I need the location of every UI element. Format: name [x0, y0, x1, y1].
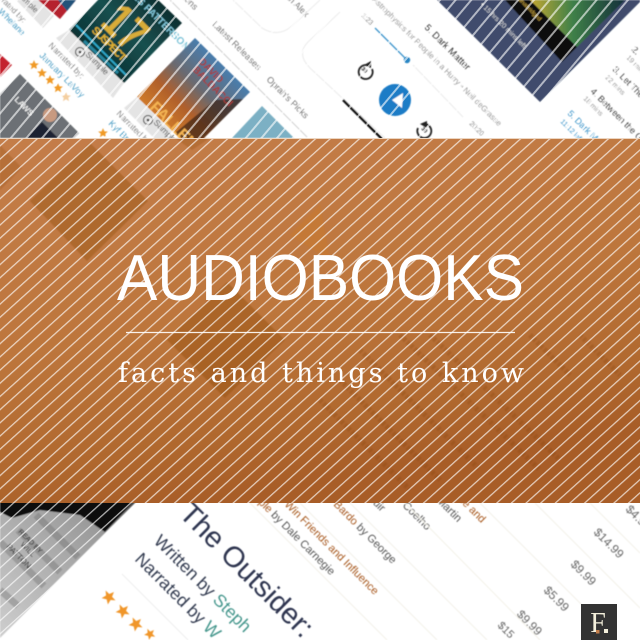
narrator text 1: [29, 40, 87, 101]
list: book titles: Coelho: [400, 500, 433, 533]
sample strip 2: [124, 97, 179, 145]
sample strip 1: [56, 30, 124, 98]
chapter list: 11:12 left: [559, 118, 584, 143]
rating divider: [122, 574, 188, 640]
track title: 5. Dark Matter: [422, 22, 472, 73]
narrator text 2: [98, 108, 155, 154]
logo badge: F: [590, 608, 606, 639]
book cover: grey politician: LAWS: [13, 95, 36, 118]
narrator text 2: Narrated by:: [115, 108, 155, 148]
red cover fragment: [0, 54, 12, 77]
narrator text 1: Narrated by:: [47, 40, 87, 80]
book cover: 17th Suspect: [69, 0, 192, 83]
scrubber bar: [343, 100, 382, 139]
rating stars: [100, 587, 158, 640]
sample strip 1: Sample: [84, 49, 111, 77]
list: prices: [495, 502, 640, 640]
list: book titles: Win Friends and Influence: [282, 499, 381, 597]
band top edge: [0, 138, 640, 140]
title: AUDIOBOOKS: [117, 241, 524, 314]
list: book titles: Bardo by George: [331, 499, 399, 566]
book cover: top-left red: [38, 0, 76, 19]
narrator line: Narrated by W: [131, 549, 225, 640]
book cover: Fallen: [137, 38, 250, 153]
bottom left book cover: Will Patton: WILL: [19, 540, 37, 559]
book title: The Outsider:: [173, 497, 320, 640]
chapter list: 5. Dark M: [566, 108, 600, 143]
list: prices: $9.99: [568, 557, 599, 589]
player panel: [343, 0, 504, 139]
time elapsed: 1:23: [360, 12, 374, 27]
list row dividers: [250, 503, 640, 640]
list: book titles: ple by Dale Carnegie: [256, 497, 337, 578]
cover credit: READ BY: [17, 528, 43, 555]
narrator text 1: January LaVoy: [38, 50, 87, 100]
sample strip top-left: [15, 0, 54, 28]
list: book titles: R. Martin: [424, 485, 464, 525]
book cover: grey politician: [0, 74, 79, 138]
book art gradient: [530, 0, 625, 47]
play button: [379, 84, 411, 116]
tab labels: Oprah's Picks: [265, 74, 311, 121]
tab divider: [170, 0, 307, 137]
list: prices: $5.99: [541, 583, 572, 615]
tab labels: [169, 0, 312, 121]
list: book titles: ce and: [456, 494, 488, 525]
cover author: DAVID: [196, 56, 225, 86]
narrator text 2: Kyf Brown: [107, 118, 143, 154]
stripes over bottom book: [0, 503, 136, 638]
icon: rewind 30: 30: [360, 66, 368, 75]
cover title: FALLEN: [146, 99, 201, 153]
band: ghosted screenshot shapes: [0, 138, 620, 490]
sample strip 2: Sample: [152, 117, 179, 145]
list: book titles: [256, 485, 488, 597]
stripes over top screenshots: [0, 0, 640, 138]
remaining time: • 15 hrs 20 mins left: [479, 1, 527, 50]
chapter list: [559, 44, 640, 145]
list: prices: $14.99: [591, 525, 627, 561]
author line: Written by Steph: [150, 531, 256, 636]
cover mottled bands: [0, 515, 78, 606]
logo badge: [581, 604, 617, 640]
cover subtitle: SUSPECT: [89, 25, 129, 64]
icon: forward 30: 30: [420, 126, 428, 135]
icon: rewind 30: [359, 61, 373, 79]
tab labels: Latest Releases: [211, 19, 264, 72]
icon: forward 30: [417, 121, 431, 138]
time remaining: 20:20: [468, 120, 485, 138]
book detail: The Outsider: [100, 497, 320, 640]
title rule: [126, 332, 515, 334]
bottom left book cover: Will Patton: [0, 500, 138, 638]
bottom left book cover: Will Patton: PATTON: [5, 542, 33, 571]
navy book panel: [437, 0, 640, 102]
cover teal band: [76, 25, 126, 75]
list: prices: $9.99: [514, 607, 545, 639]
progress knob: [404, 57, 410, 63]
list: book titles: Muir: [364, 491, 388, 514]
orange overlay band: [0, 138, 640, 503]
chapter list: 18 mins: [582, 95, 604, 118]
book black band: [505, 0, 577, 62]
phone outline: [233, 0, 463, 138]
chapter list: 22 mins: [604, 74, 626, 97]
progress bar: [375, 28, 407, 60]
cover dark top: [0, 500, 135, 532]
diagonal stripes: [0, 139, 640, 503]
subtitle: facts and things to know: [118, 358, 524, 389]
book cover: light blue: [232, 106, 294, 138]
book cover: Fallen: BALDACCI: [190, 64, 235, 109]
